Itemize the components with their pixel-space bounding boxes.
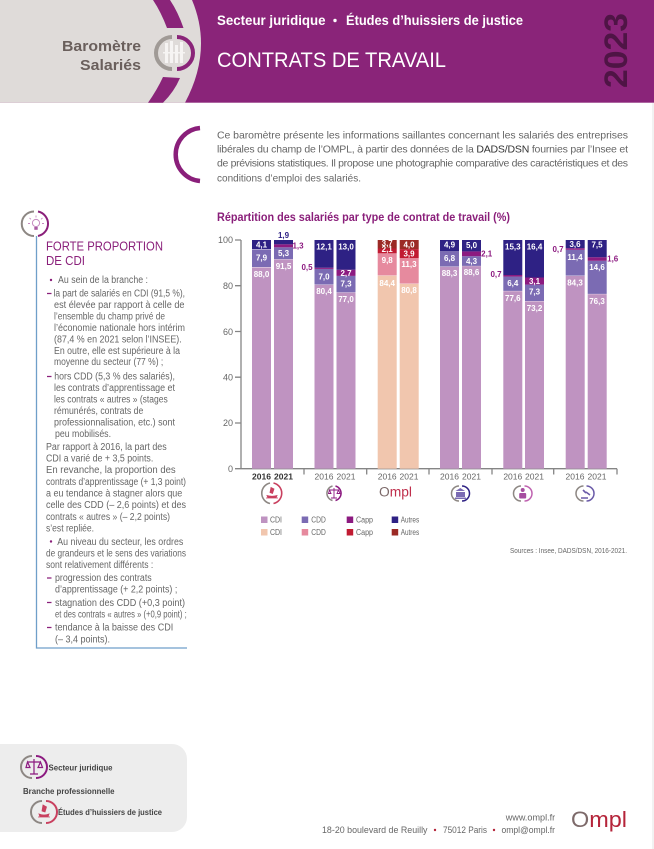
bar: branche 5 2021: 16,4 bbox=[527, 242, 543, 252]
icon: scales bbox=[327, 486, 341, 500]
y axis: 80 bbox=[223, 281, 233, 291]
findings text: Par rapport à 2016, la part des bbox=[46, 442, 167, 453]
barometer label: Baromètre bbox=[62, 39, 141, 55]
bar: branche 6 2021: 7,5 bbox=[591, 240, 603, 250]
y axis: 100 bbox=[218, 235, 233, 245]
icon: person bbox=[514, 486, 532, 501]
findings text: les contrats d’apprentissage et bbox=[54, 383, 175, 394]
footer contact: 75012 Paris bbox=[443, 825, 487, 836]
y axis: 20 bbox=[223, 418, 233, 428]
findings text: (87,4 % en 2021 selon l’INSEE). bbox=[54, 334, 182, 346]
legend: Capp bbox=[356, 528, 373, 537]
legend label: branch name: Études d’huissiers de justice bbox=[58, 808, 163, 817]
findings text: rémunérés, contrats de bbox=[54, 406, 144, 417]
panel: sector legend bbox=[0, 744, 187, 832]
bar: branche 5 2021: 7,3 bbox=[529, 288, 541, 296]
bar: huissiers 2016: 4,1 bbox=[256, 240, 268, 250]
bar: branche 6 2021: 14,6 bbox=[589, 263, 605, 272]
bar: secteur 2016: 0,5 bbox=[301, 263, 313, 272]
findings text: a eu tendance à stagner alors que bbox=[46, 488, 183, 500]
findings text bbox=[46, 275, 187, 646]
intro text: conditions d’emploi des salariés. bbox=[217, 172, 361, 184]
bar: branche 4 2021 bbox=[462, 240, 493, 469]
y axis: 40 bbox=[223, 372, 233, 382]
findings text: En outre, elle est supérieure à la bbox=[54, 346, 180, 357]
bar: secteur 2016: 80,4 bbox=[316, 287, 332, 296]
findings text: professionnalisation, etc.) sont bbox=[54, 418, 175, 428]
sources note: Sources : Insee, DADS/DSN, 2016-2021. bbox=[510, 546, 627, 555]
chart title: Répartition des salariés par type de contrat de travail (%) bbox=[217, 210, 510, 224]
bar: huissiers 2016: 7,9 bbox=[256, 254, 268, 262]
year labels: 2021 bbox=[274, 472, 293, 482]
findings text: l’ensemble du champ privé de bbox=[54, 312, 165, 322]
header subtitle: Études d’huissiers de justice bbox=[346, 13, 523, 28]
year labels: 2021 bbox=[337, 472, 356, 482]
bar: huissiers 2016 bbox=[252, 240, 271, 469]
findings text: peu mobilisés. bbox=[55, 429, 111, 440]
year labels bbox=[252, 472, 607, 482]
header banner bbox=[0, 0, 654, 103]
bar: OMPL 2016: 3,7 bbox=[382, 239, 393, 248]
bar: secteur 2016: 7,0 bbox=[318, 272, 330, 282]
legend: CDD bbox=[311, 516, 326, 524]
y axis: 60 bbox=[223, 327, 233, 337]
footer contact: 18-20 boulevard de Reuilly bbox=[322, 825, 428, 836]
findings text: Au sein de la branche : bbox=[58, 275, 148, 286]
legend: CDI bbox=[270, 528, 282, 537]
panel heading: FORTE PROPORTION bbox=[46, 238, 163, 254]
footer contact: www.ompl.fr bbox=[505, 812, 555, 824]
findings text: de grandeurs et le sens des variations bbox=[46, 548, 186, 560]
legend: CDI bbox=[270, 516, 282, 524]
findings text: (– 3,4 points). bbox=[55, 634, 110, 646]
year: 2023 bbox=[598, 13, 634, 88]
legend bbox=[261, 516, 419, 537]
bar: branche 4 2021: 2,1 bbox=[481, 250, 493, 258]
findings text: CDI a varié de + 3,5 points. bbox=[46, 454, 153, 464]
findings text: l’économie nationale hors intérim bbox=[54, 323, 185, 334]
bar: huissiers 2021: 91,5 bbox=[276, 262, 292, 271]
findings text: tendance à la baisse des CDI bbox=[55, 622, 173, 634]
icon: light bulb bbox=[22, 212, 48, 236]
bar: branche 5 2021 bbox=[525, 240, 544, 469]
findings text: s’est repliée. bbox=[46, 524, 94, 534]
bar: branche 4 2016 bbox=[440, 240, 459, 469]
findings text: hors CDD (5,3 % des salariés), bbox=[54, 372, 175, 382]
bar: branche 6 2016: 84,3 bbox=[567, 278, 583, 288]
bar: branche 4 2021: 4,3 bbox=[466, 257, 478, 266]
logo: Ompl chart: Ompl bbox=[379, 485, 412, 500]
legend: Autres bbox=[401, 516, 419, 524]
bar: OMPL 2021: 3,9 bbox=[403, 250, 415, 258]
legend: CDD bbox=[311, 528, 326, 537]
panel: key findings bbox=[22, 212, 187, 648]
bar: OMPL 2016: 2,1 bbox=[382, 245, 393, 254]
panel heading: DE CDI bbox=[46, 253, 85, 268]
logo: Ompl footer: Ompl bbox=[571, 807, 627, 832]
bar: branche 6 2021 bbox=[588, 240, 619, 469]
bar: OMPL 2016 bbox=[378, 239, 397, 469]
findings text: stagnation des CDD (+0,3 point) bbox=[55, 598, 185, 609]
y axis bbox=[218, 235, 617, 474]
bar: secteur 2021 bbox=[336, 240, 356, 469]
icon: huissiers stamp bbox=[262, 483, 282, 504]
bar: huissiers 2021: 1,3 bbox=[292, 242, 304, 250]
bar: secteur 2021: 13,0 bbox=[338, 242, 354, 252]
bar: branche 4 2016: 6,8 bbox=[444, 254, 456, 263]
findings text: celle des CDD (– 2,6 points) et des bbox=[46, 500, 186, 511]
bar: secteur 2021: 2,7 bbox=[340, 269, 352, 278]
bar: branche 5 2016: 6,4 bbox=[507, 279, 519, 288]
year labels: 2021 bbox=[525, 472, 544, 482]
bar: OMPL 2021 bbox=[400, 240, 419, 469]
icon: stamp legend bbox=[31, 801, 57, 823]
bar: branche 5 2016: 15,3 bbox=[505, 242, 521, 252]
year labels: 2021 bbox=[400, 472, 419, 482]
legend: Capp bbox=[356, 516, 373, 524]
bar: branche 6 2016: 0,7 bbox=[552, 245, 564, 254]
header title: CONTRATS DE TRAVAIL bbox=[217, 49, 446, 72]
bar: secteur 2021: 77,0 bbox=[338, 295, 354, 304]
intro text: Ce baromètre présente les informations saillantes concernant les salariés des entreprises bbox=[217, 130, 628, 142]
header subtitle: Secteur juridique bbox=[217, 13, 326, 28]
icon: intro bracket bbox=[176, 128, 200, 181]
bar: huissiers 2021: 5,3 bbox=[278, 249, 290, 258]
legend label: branch: Branche professionnelle bbox=[23, 787, 115, 796]
bar: huissiers 2021: 1,9 bbox=[278, 231, 290, 240]
panel heading bbox=[46, 238, 163, 268]
intro text: libérales du champ de l’OMPL, à partir des données de la DADS/DSN fournies par l’Insee et bbox=[217, 144, 628, 156]
findings text: la part de salariés en CDI (91,5 %), bbox=[54, 288, 185, 300]
bar: branche 5 2021: 3,1 bbox=[529, 277, 541, 286]
legend: Autres bbox=[401, 528, 419, 537]
y axis: 0 bbox=[228, 464, 233, 474]
bar: huissiers 2021 bbox=[274, 231, 304, 469]
findings text: d’apprentissage (+ 2,2 points) ; bbox=[55, 584, 177, 596]
year labels: 2016 bbox=[440, 472, 459, 482]
bar: branche 6 2021: 76,3 bbox=[589, 297, 605, 306]
bar: branche 6 2021: 1,6 bbox=[607, 254, 619, 264]
findings text: et des contrats « autres » (+0,9 point) ; bbox=[55, 610, 187, 620]
bar: branche 5 2021: 73,2 bbox=[527, 304, 543, 313]
icon: barometer logo bbox=[156, 37, 193, 69]
year labels: 2016 bbox=[252, 472, 271, 482]
bar chart: contract types bbox=[218, 231, 619, 537]
year labels: 2021 bbox=[462, 472, 481, 482]
year labels: 2021 bbox=[588, 472, 607, 482]
findings text: contrats d’apprentissage (+ 1,3 point) bbox=[46, 477, 186, 488]
intro text bbox=[217, 130, 628, 184]
icon: building bbox=[452, 486, 470, 501]
year labels: 2016 bbox=[566, 472, 585, 482]
bar: branche 4 2021: 88,6 bbox=[464, 268, 480, 277]
bar: branche 6 2016 bbox=[552, 240, 585, 469]
legend label: sector: Secteur juridique bbox=[48, 764, 113, 772]
bar: branche 4 2016: 88,3 bbox=[442, 269, 458, 278]
findings text: Au niveau du secteur, les ordres bbox=[57, 537, 183, 548]
bar: branche 4 2021: 5,0 bbox=[466, 241, 478, 250]
bar: secteur 2016: 12,1 bbox=[316, 242, 332, 252]
year labels: 2016 bbox=[378, 472, 397, 482]
icon: gavel bbox=[576, 486, 594, 501]
findings text: est élevée par rapport à celle de bbox=[54, 300, 185, 311]
findings text: les contrats « autres » (stages bbox=[54, 394, 168, 406]
findings text: moyenne du secteur (77 %) ; bbox=[54, 357, 163, 368]
bar: OMPL 2021: 80,8 bbox=[401, 286, 417, 295]
year labels: 2016 bbox=[315, 472, 334, 482]
bar: OMPL 2016: 84,4 bbox=[379, 279, 396, 288]
bar: branche 5 2016: 77,6 bbox=[505, 294, 521, 303]
bar: secteur 2021: 7,3 bbox=[340, 280, 352, 288]
bar: OMPL 2021: 11,3 bbox=[401, 260, 417, 269]
barometer label bbox=[62, 39, 141, 74]
icon: scales legend bbox=[21, 756, 47, 778]
footer contact bbox=[322, 812, 555, 836]
findings text: contrats « autres » (– 2,2 points) bbox=[46, 512, 170, 523]
bar: OMPL 2021: 4,0 bbox=[403, 240, 415, 250]
bar: branche 5 2016 bbox=[490, 240, 522, 469]
findings text: sont relativement différents : bbox=[46, 560, 153, 571]
findings text: progression des contrats bbox=[55, 573, 152, 584]
bar: branche 4 2016: 4,9 bbox=[444, 240, 456, 250]
bar: branche 6 2016: 3,6 bbox=[569, 240, 581, 249]
bar: huissiers 2016: 88,0 bbox=[254, 270, 270, 279]
footer contact: ompl@ompl.fr bbox=[502, 825, 555, 836]
barometer label: Salariés bbox=[80, 58, 141, 74]
year labels: 2016 bbox=[503, 472, 523, 482]
header subtitle bbox=[217, 13, 523, 28]
bar: branche 6 2016: 11,4 bbox=[567, 253, 583, 262]
bar: branche 5 2016: 0,7 bbox=[490, 270, 502, 279]
findings text: En revanche, la proportion des bbox=[46, 465, 176, 476]
intro text: de prévisions statistiques. Il propose une photographie comparative des caractéristiques et des bbox=[217, 158, 628, 170]
bar: secteur 2016 bbox=[301, 240, 334, 469]
bar: OMPL 2016: 9,8 bbox=[382, 256, 393, 265]
